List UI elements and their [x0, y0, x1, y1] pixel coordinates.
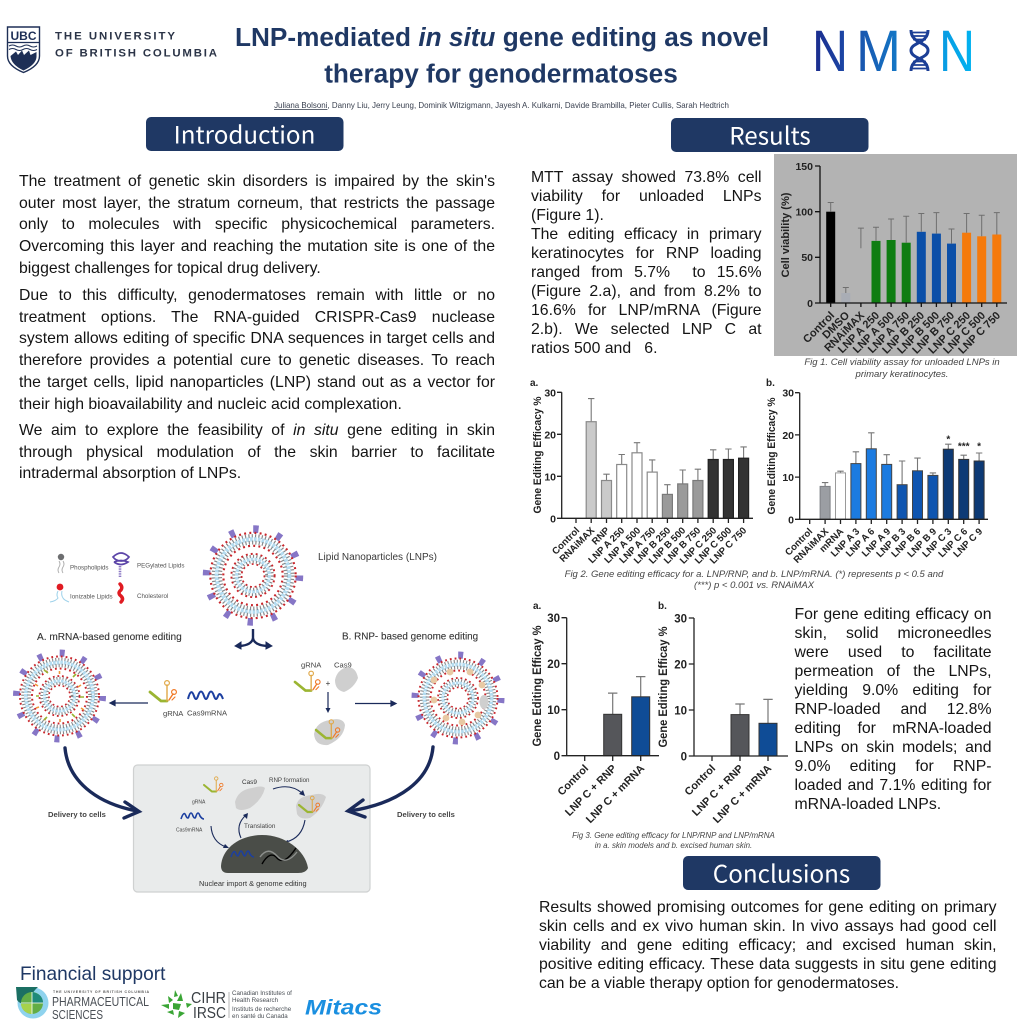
group: RNP assembly: gRNA: [301, 660, 322, 670]
text block: skin results: [794, 606, 992, 812]
chart: Fig 1 cell viability: LNP B 750: [910, 310, 957, 356]
labels: Delivery to cells: Delivery to cells: [48, 810, 106, 819]
text block: introduction paragraph 1: The treatment of genetic skin disorders is impaired by the skin's: [19, 173, 495, 190]
text block: results summary: (Figure 1).: [531, 207, 604, 224]
chart: Fig 2b LNP/mRNA: mRNA: [818, 526, 846, 555]
icon: Cas9mRNA in cell: [181, 813, 204, 819]
chart: Fig 1 cell viability: 0: [807, 298, 813, 310]
text block: conclusions: can be a viable therapy option for genodermatoses.: [539, 975, 899, 992]
title: [235, 22, 769, 88]
caption: Fig 1: Fig 1. Cell viability assay for unloaded LNPs in: [804, 357, 1000, 368]
legend: lipid components: [50, 553, 184, 602]
authors: Juliana Bolsoni, Danny Liu, Jerry Leung, Dominik Witzigmann, Jayesh A. Kulkarni, Davide Brambilla, Pieter Cullis, Sarah Hedtrich: [274, 101, 729, 110]
chart: Fig 2a LNP/RNP: LNP B 750: [662, 525, 703, 567]
chart: Fig 3b excised human skin: 0: [681, 752, 687, 764]
text block: introduction paragraph 2: their high bioavailability and nucleic acid complexation.: [19, 396, 402, 413]
logo: Mitacs: Mitacs: [305, 996, 382, 1020]
text block: introduction paragraph 1: outer most layer, the stratum corneum, that restricts the passage: [19, 195, 495, 212]
legend: lipid components: PEGylated Lipids: [137, 562, 184, 570]
text block: conclusions: [539, 898, 996, 992]
chart: Fig 2b LNP/mRNA: LNP C 9: [951, 526, 985, 560]
caption: Fig 3: Fig 3. Gene editing efficacy for LNP/RNP and LNP/mRNA: [572, 831, 775, 840]
text block: introduction paragraph 3: intradermal absorption of LNPs.: [19, 465, 241, 482]
heading: Financial support: Financial support: [20, 964, 166, 985]
text block: introduction paragraph 1: Overcoming this layer and reaching the mutation site is one of the: [19, 238, 495, 255]
group: RNP assembly: [295, 660, 358, 745]
logo: CIHR IRSC: IRSC: [193, 1005, 226, 1022]
chart: Fig 2a LNP/RNP: LNP A 500: [602, 525, 643, 566]
text block: skin results: LNPs on skin models; and: [794, 738, 992, 756]
logo: CIHR IRSC: Instituts de recherche: [232, 1006, 292, 1013]
chart: Fig 2b LNP/mRNA: RNAiMAX: [792, 526, 832, 566]
error bars: [588, 399, 747, 494]
icon: Cas9 protein: [235, 786, 265, 810]
icon: LNP with RNP cargo: [415, 655, 501, 741]
chart: Fig 1 cell viability: RNAiMAX: [822, 309, 868, 354]
text block: skin results: For gene editing efficacy on: [794, 606, 992, 622]
icon: Cas9 mRNA wave: [188, 692, 223, 699]
chart: Fig 1 cell viability: [774, 154, 1017, 356]
chart: Fig 3b excised human skin: 20: [674, 660, 687, 672]
panel: cell: Cas9: [242, 779, 257, 786]
significance stars: [946, 434, 981, 452]
caption: Fig 1: [804, 357, 1000, 380]
chart: Fig 3b excised human skin: b.: [658, 601, 667, 612]
caption: Fig 2: [565, 569, 944, 591]
icon: gRNA: [150, 681, 176, 701]
legend: lipid components: Ionizable Lipids: [70, 594, 113, 600]
chart: Fig 1 cell viability: LNP C 750: [956, 310, 1003, 356]
chart: Fig 3b excised human skin: [656, 601, 788, 826]
chart: Fig 1 cell viability: LNP A 750: [866, 310, 912, 356]
text block: results summary: viability for unloaded LNPs: [531, 188, 762, 205]
heading: Introduction: Introduction: [174, 116, 315, 150]
wordmark: [55, 30, 219, 60]
bars: [586, 422, 749, 518]
icon: DNA helix: [911, 30, 928, 71]
arrow: RNP into LNP B: [355, 701, 396, 706]
logo: CIHR IRSC: Health Research: [232, 997, 279, 1004]
labels: gRNA and Cas9mRNA: Cas9mRNA: [187, 708, 228, 718]
logo: Pharmaceutical Sciences: [16, 987, 149, 1022]
chart: Fig 2a LNP/RNP: LNP B 250: [632, 525, 673, 567]
chart: Fig 2b LNP/mRNA: Control: [783, 526, 815, 558]
chart: Fig 2b LNP/mRNA: LNP C 3: [920, 526, 954, 560]
text block: conclusions: positive editing efficacy. These data suggests in situ gene editing: [539, 956, 996, 973]
chart: Fig 2a LNP/RNP: [530, 378, 753, 567]
cell pathway arrows: [211, 787, 305, 847]
chart: Fig 2a LNP/RNP: 30: [544, 387, 556, 399]
logo: Pharmaceutical Sciences: THE UNIVERSITY OF BRITISH COLUMBIA: [53, 990, 149, 994]
chart: Fig 2b LNP/mRNA: LNP B 9: [905, 526, 939, 560]
text block: results summary: keratinocytes for RNP loading: [531, 245, 762, 262]
chart: Fig 3a skin models: a.: [533, 601, 542, 612]
logo: CIHR IRSC: Canadian Institutes of: [232, 990, 292, 997]
chart: Fig 3a skin models: Control: [555, 763, 591, 798]
logo: Pharmaceutical Sciences: SCIENCES: [52, 1007, 103, 1022]
text block: skin results: loaded and 7.1% editing for: [794, 776, 992, 794]
icon: RNP complex: [296, 794, 326, 818]
icon: UBC shield: UBC: [10, 29, 37, 43]
caption: Fig 1: primary keratinocytes.: [855, 369, 948, 380]
panel: cell: Translation: [244, 823, 276, 830]
panel: cell: gRNA: [192, 800, 206, 806]
text block: results summary: (Figure 2.a), and from 8.2% to: [531, 283, 762, 300]
chart: Fig 1 cell viability: Cell viability (%): [780, 192, 792, 278]
labels: gRNA and Cas9mRNA: gRNA: [163, 709, 184, 718]
significance stars: *: [946, 434, 950, 446]
chart: Fig 3b excised human skin: Control: [682, 763, 718, 798]
chart: Fig 1 cell viability: LNP B 250: [880, 310, 927, 356]
chart: Fig 2a LNP/RNP: 20: [544, 429, 556, 441]
label: B. RNP-based genome editing: B. RNP- based genome editing: [342, 632, 478, 642]
title: LNP-mediated in situ gene editing as novel: [235, 22, 769, 52]
chart: Fig 3a skin models: 0: [554, 751, 560, 763]
chart: Fig 2b LNP/mRNA: [766, 378, 988, 566]
chart: Fig 2a LNP/RNP: RNP: [590, 525, 613, 547]
chart: Fig 2b LNP/mRNA: LNP A 6: [844, 526, 877, 560]
label: Lipid Nanoparticles: Lipid Nanoparticles (LNPs): [318, 552, 437, 563]
text block: skin results: 9.0% editing for RNP-: [794, 758, 992, 774]
chart: Fig 2b LNP/mRNA: LNP B 6: [889, 526, 923, 560]
legend: lipid components: Phospholipids: [70, 564, 109, 572]
chart: Fig 1 cell viability: LNP C 500: [941, 310, 988, 356]
text block: results summary: ratios 500 and 6.: [531, 340, 657, 357]
panel: cell: [134, 765, 370, 892]
text block: introduction paragraph 2: Due to this difficulty, genodermatoses remain with little or no: [19, 287, 495, 304]
chart: Fig 1 cell viability: DMSO: [820, 309, 852, 341]
chart: Fig 1 cell viability: LNP A 250: [836, 310, 882, 356]
logo: CIHR IRSC: CIHR: [191, 990, 226, 1007]
chart: Fig 2a LNP/RNP: LNP C 500: [693, 525, 734, 567]
title: therapy for genodermatoses: [324, 58, 678, 88]
bars: [826, 212, 1001, 303]
arrow: delivery from LNP A: [65, 748, 139, 818]
text block: conclusions: viability and gene editing efficacy; and excised human skin,: [539, 937, 996, 954]
chart: Fig 1 cell viability: 50: [801, 252, 813, 264]
error bars: [822, 433, 982, 486]
diagram: LNP gene editing mechanism: [16, 529, 501, 892]
caption: Fig 2: Fig 2. Gene editing efficacy for a. LNP/RNP, and b. LNP/mRNA. (*) represents p < 0.5 and: [565, 569, 944, 580]
heading: Conclusions: Conclusions: [713, 854, 850, 890]
chart: Fig 2a LNP/RNP: 10: [544, 471, 556, 483]
text block: introduction paragraph 1: biggest challenges for topical drug delivery.: [19, 260, 321, 277]
logo: NMIN: N: [812, 20, 848, 84]
chart: Fig 3b excised human skin: Gene Editing Efficay %: [656, 626, 670, 748]
chart: Fig 2b LNP/mRNA: 0: [788, 514, 794, 526]
arrow: cargo into LNP A: [110, 700, 148, 706]
chart: Fig 2b LNP/mRNA: 30: [782, 388, 794, 400]
chart: Fig 3a skin models: 30: [547, 613, 560, 625]
heading: Results: [671, 116, 868, 152]
logo: UBC shield and wordmark: [8, 27, 219, 72]
text block: introduction paragraph 2: therefore provides a potential cure to genetic diseases. To reach: [19, 352, 495, 369]
text block: introduction paragraph 2: [19, 287, 495, 413]
chart: Fig 2a LNP/RNP: LNP C 750: [708, 525, 749, 567]
text block: results summary: [531, 168, 762, 357]
chart: Fig 1 cell viability: LNP B 500: [895, 310, 942, 356]
chart: Fig 2a LNP/RNP: LNP B 500: [647, 525, 688, 567]
chart: Fig 2b LNP/mRNA: 20: [782, 430, 794, 442]
chart: Fig 2b LNP/mRNA: LNP A 9: [860, 526, 893, 560]
logo: CIHR IRSC: en santé du Canada: [232, 1013, 288, 1020]
logo: NMIN: [812, 18, 975, 84]
chart: Fig 3a skin models: LNP C + mRNA: [584, 762, 647, 826]
chart: Fig 3b excised human skin: LNP C + RNP: [690, 763, 746, 819]
chart: Fig 1 cell viability: 100: [795, 206, 813, 218]
panel: cell: Cas9mRNA: [176, 828, 203, 834]
wordmark: OF BRITISH COLUMBIA: [55, 48, 219, 60]
heading: Conclusions: [683, 854, 880, 890]
chart: Fig 2a LNP/RNP: 0: [550, 513, 556, 525]
chart: Fig 3a skin models: 20: [547, 659, 560, 671]
bars: [820, 449, 984, 519]
text block: skin results: editing for mRNA-loaded: [794, 720, 992, 736]
text block: skin results: mRNA-loaded LNPs.: [794, 796, 941, 812]
caption: Fig 2: (***) p < 0.001 vs. RNAiMAX: [694, 580, 815, 591]
chart: Fig 3a skin models: LNP C + RNP: [563, 763, 619, 819]
text block: skin results: permeation of the LNPs,: [794, 662, 992, 680]
caption: Fig 3: in a. skin models and b. excised human skin.: [595, 841, 752, 850]
logo: CIHR IRSC: [161, 990, 292, 1022]
text block: introduction paragraph 1: only to molecules with specific physicochemical parameters.: [19, 216, 495, 233]
icon: DNA in nucleus: [260, 848, 297, 864]
chart: Fig 1 cell viability: Control: [801, 310, 837, 346]
icon: LNP with mRNA cargo: [16, 653, 102, 739]
text block: results summary: MTT assay showed 73.8% cell: [531, 168, 762, 186]
significance stars: *: [977, 442, 981, 452]
group: RNP assembly: +: [326, 679, 331, 688]
text block: introduction paragraph 2: system allows editing of specific DNA sequences in target cells and: [19, 330, 495, 347]
chart: Fig 2b LNP/mRNA: b.: [766, 378, 775, 389]
chart: Fig 3b excised human skin: LNP C + mRNA: [711, 762, 774, 826]
chart: Fig 3b excised human skin: 10: [674, 706, 687, 718]
text block: results summary: ranged from 5.7% to 15.6%: [531, 264, 762, 281]
icon: nucleus: [221, 835, 308, 873]
icon: LNP top: [207, 529, 299, 622]
logo: NMIN: N: [939, 20, 975, 84]
chart: Fig 2a LNP/RNP: Control: [550, 525, 582, 557]
labels: Delivery to cells: Delivery to cells: [397, 810, 455, 819]
labels: gRNA and Cas9mRNA: [163, 708, 228, 718]
icon: UBC shield: [8, 27, 40, 72]
text block: introduction paragraph 3: [19, 422, 495, 482]
chart: Fig 2a LNP/RNP: a.: [530, 378, 539, 389]
text block: introduction paragraph 2: the target cells, lipid nanoparticles (LNP) stand out as a vector for: [19, 374, 495, 391]
arrow: delivery from LNP B: [348, 747, 433, 817]
wordmark: THE UNIVERSITY: [55, 30, 177, 42]
text block: results summary: 16.6% for LNP/mRNA (Figure: [531, 302, 762, 319]
chart: Fig 2a LNP/RNP: Gene Editing Efficacy %: [532, 396, 544, 514]
chart: Fig 2a LNP/RNP: LNP A 250: [586, 525, 627, 566]
chart: Fig 3a skin models: Gene Editing Efficay %: [530, 625, 544, 746]
icon: pharmaceutical sciences emblem: [16, 987, 48, 1018]
text block: skin results: RNP-loaded and 12.8%: [794, 700, 992, 718]
chart: Fig 1 cell viability: LNP C 250: [926, 310, 973, 356]
text block: introduction paragraph 3: through physical modulation of the skin barrier to facilitate: [19, 444, 495, 461]
chart: Fig 2b LNP/mRNA: 10: [782, 472, 794, 484]
chart: Fig 3a skin models: [530, 601, 659, 826]
chart: Fig 2a LNP/RNP: RNAiMAX: [558, 525, 598, 565]
text block: introduction paragraph 1: [19, 173, 495, 277]
chart: Fig 2a LNP/RNP: LNP A 750: [617, 525, 658, 566]
chart: Fig 3b excised human skin: 30: [674, 614, 687, 626]
chart: Fig 2b LNP/mRNA: LNP C 6: [936, 526, 970, 560]
group: RNP assembly: Cas9: [334, 660, 352, 670]
text block: results summary: 2.b). We selected LNP C at: [531, 321, 762, 338]
arrow: split to both routes: [235, 629, 272, 649]
significance stars: ***: [958, 442, 970, 452]
caption: Fig 3: [572, 831, 775, 850]
text block: introduction paragraph 3: We aim to explore the feasibility of in situ gene editing in skin: [19, 422, 495, 439]
chart: Fig 1 cell viability: 150: [795, 161, 813, 173]
label: A. mRNA-based genome editing: A. mRNA-based genome editing: [37, 632, 182, 643]
text block: results summary: The editing efficacy in primary: [531, 226, 762, 243]
text block: introduction paragraph 2: treatment options. The RNA-guided CRISPR-Cas9 nuclease: [19, 309, 495, 326]
panel: cell: Nuclear import & genome editing: [199, 879, 307, 888]
text block: skin results: skin, solid microneedles: [794, 624, 992, 642]
text block: skin results: yielding 9.0% editing for: [794, 682, 992, 698]
chart: Fig 2a LNP/RNP: LNP C 250: [678, 525, 719, 567]
icon: gRNA in cell: [204, 777, 223, 791]
panel: cell: RNP formation: [269, 777, 310, 784]
text block: conclusions: Results showed promising outcomes for gene editing on primary: [539, 898, 996, 916]
text block: conclusions: skin cells and ex vivo human skin. In vivo assays had good cell: [539, 918, 996, 935]
chart: Fig 2b LNP/mRNA: LNP A 3: [829, 526, 862, 560]
chart: Fig 1 cell viability: LNP A 500: [851, 310, 897, 356]
chart: Fig 3a skin models: 10: [547, 705, 560, 717]
legend: lipid components: Cholesterol: [137, 593, 168, 600]
text block: skin results: were used to facilitate: [794, 644, 992, 660]
labels: Delivery to cells: [48, 810, 455, 819]
heading: Results: Results: [729, 116, 811, 152]
icon: CIHR leaf: [161, 990, 192, 1018]
logo: Pharmaceutical Sciences: PHARMACEUTICAL: [52, 994, 149, 1009]
chart: Fig 2b LNP/mRNA: LNP B 3: [874, 526, 908, 560]
logo: NMIN: M: [856, 18, 901, 83]
chart: Fig 2b LNP/mRNA: Gene Editing Efficacy %: [766, 397, 778, 514]
